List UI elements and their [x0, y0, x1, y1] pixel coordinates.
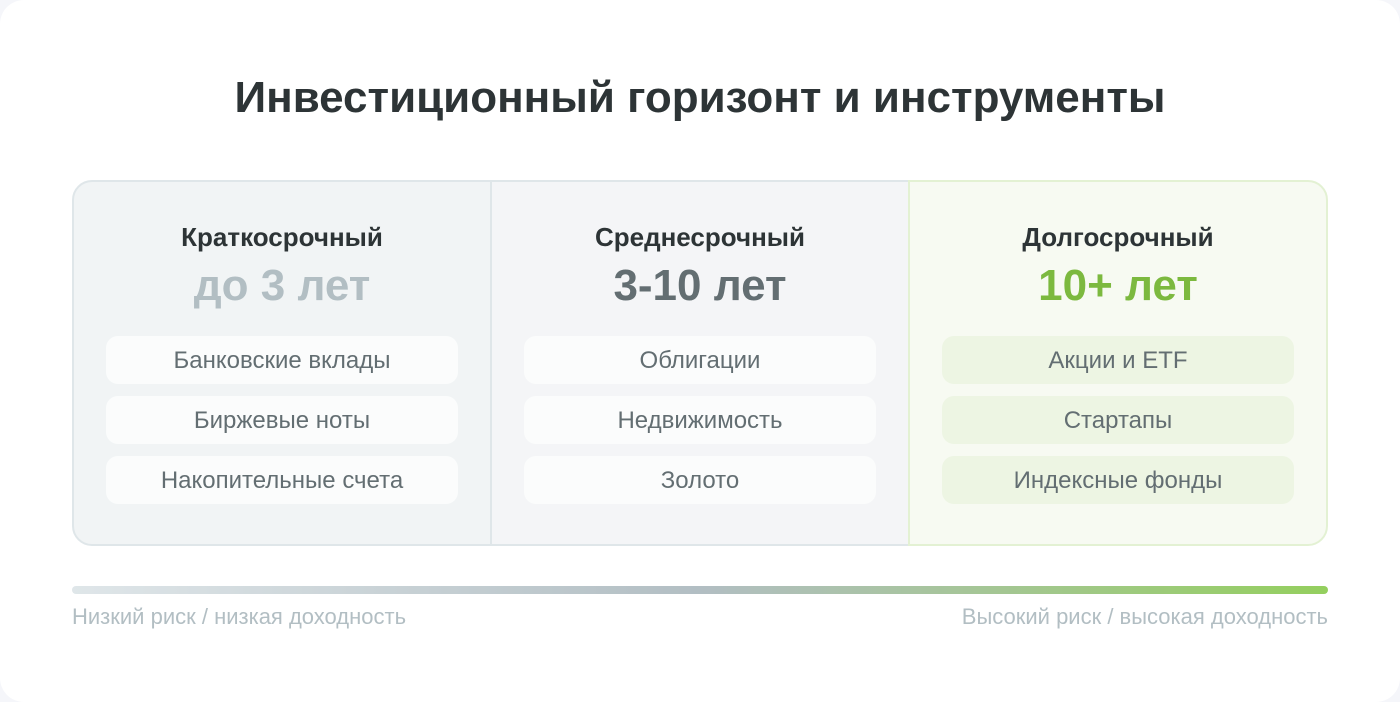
item: real estate: Недвижимость — [617, 407, 783, 434]
item: gold — [524, 456, 876, 504]
item: stocks and ETF: Акции и ETF — [1048, 347, 1188, 374]
title: Инвестиционный горизонт и инструменты — [234, 73, 1165, 122]
item: savings accounts — [106, 456, 458, 504]
value: 3-10 years: 3-10 лет — [613, 261, 787, 310]
heading: medium term: Среднесрочный — [595, 222, 805, 252]
item: startups — [942, 396, 1294, 444]
value: up to 3 years: до 3 лет — [194, 261, 370, 310]
item: exchange notes — [106, 396, 458, 444]
item: stocks and ETF — [942, 336, 1294, 384]
item: startups: Стартапы — [1064, 407, 1172, 434]
heading: long term: Долгосрочный — [1022, 222, 1214, 252]
item: gold: Золото — [661, 467, 739, 494]
heading: short term: Краткосрочный — [181, 222, 383, 252]
item: real estate — [524, 396, 876, 444]
item: index funds — [942, 456, 1294, 504]
item: exchange notes: Биржевые ноты — [194, 407, 370, 434]
item: index funds: Индексные фонды — [1014, 467, 1222, 494]
item: savings accounts: Накопительные счета — [161, 467, 403, 494]
label: high risk: Высокий риск / высокая доходность — [962, 604, 1328, 629]
value: 10+ years: 10+ лет — [1038, 261, 1198, 310]
comparison table — [72, 180, 1328, 546]
item: bonds: Облигации — [640, 347, 760, 374]
panel: long term — [908, 180, 1328, 546]
label: low risk: Низкий риск / низкая доходность — [72, 604, 406, 629]
panel: short term — [72, 180, 492, 546]
risk gradient bar — [72, 586, 1328, 594]
item: bank deposits — [106, 336, 458, 384]
item: bank deposits: Банковские вклады — [174, 347, 390, 374]
item: bonds — [524, 336, 876, 384]
panel: medium term — [492, 180, 910, 546]
